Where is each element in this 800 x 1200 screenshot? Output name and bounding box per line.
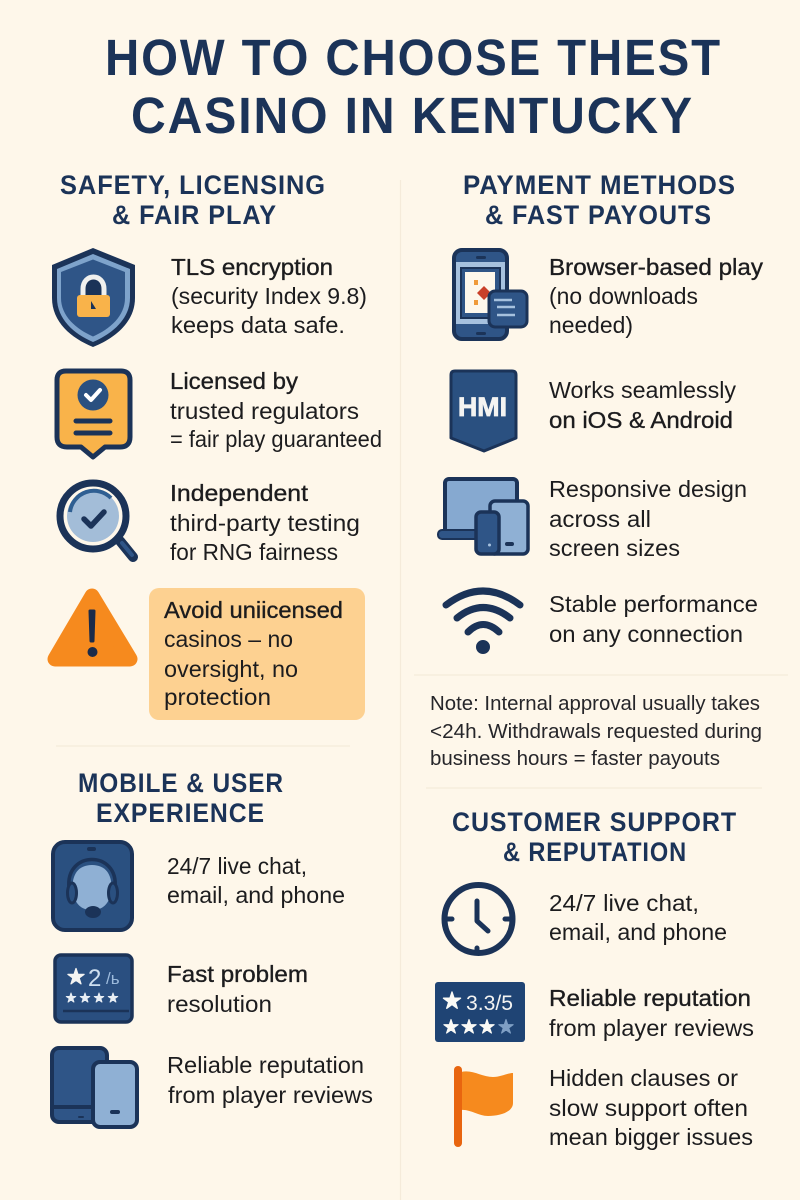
text: reliable reputation right [549, 985, 754, 1041]
icon: HMI shield badge: HMI [458, 392, 507, 422]
callout: avoid unlicensed casinos: oversight, no [164, 656, 298, 682]
icon: shield with padlock [52, 248, 135, 347]
text: independent testing [170, 480, 360, 565]
text: withdrawal note: Note: Internal approval usually takes [430, 693, 760, 715]
text: 24/7 live chat left: 24/7 live chat, [167, 853, 307, 879]
text: 24/7 live chat right [549, 890, 727, 945]
text: hidden clauses: slow support often [549, 1095, 748, 1121]
text: fast problem resolution: resolution [167, 991, 272, 1017]
text: 24/7 live chat left: email, and phone [167, 882, 345, 908]
text: licensed by: trusted regulators [170, 398, 359, 424]
text: reliable reputation right: from player reviews [549, 1015, 754, 1041]
heading: mobile: MOBILE & USER [78, 768, 284, 798]
heading: customer support: CUSTOMER SUPPORT [452, 807, 737, 837]
text: independent testing: for RNG fairness [170, 539, 338, 565]
text: stable performance: on any connection [549, 621, 743, 647]
text: works seamlessly: Works seamlessly [549, 377, 737, 403]
text: independent testing: Independent [170, 480, 309, 506]
heading: payment [463, 170, 736, 230]
text: TLS encryption: keeps data safe. [171, 312, 345, 338]
icon: 3.3/5 rating badge [435, 982, 525, 1042]
icon: 3.3/5 rating badge: 3.3/5 [466, 992, 513, 1015]
text: independent testing: third-party testing [170, 510, 360, 536]
icon: magnifier with check [60, 483, 133, 557]
text: browser-based play: Browser-based play [549, 254, 764, 280]
icon: warning triangle [55, 596, 130, 659]
panel: safety, licensing and fair play [52, 170, 382, 720]
icon: rating tile: /ь [106, 969, 120, 988]
callout: avoid unlicensed casinos: protection [164, 684, 271, 710]
text: TLS encryption: TLS encryption [171, 254, 333, 280]
text: browser-based play: (no downloads [549, 283, 698, 309]
title: CASINO IN KENTUCKY [131, 87, 694, 144]
text: hidden clauses: mean bigger issues [549, 1124, 753, 1150]
text: fast problem resolution: Fast problem [167, 961, 308, 987]
icon: wifi [446, 591, 520, 651]
text: responsive design: Responsive design [549, 476, 747, 502]
icon: rating tile: 2 [88, 965, 101, 992]
text: licensed by: = fair play guaranteed [170, 426, 382, 452]
title: HOW TO CHOOSE THEST [105, 29, 722, 86]
text: 24/7 live chat right: 24/7 live chat, [549, 890, 699, 916]
text: stable performance: Stable performance [549, 591, 758, 617]
text: 24/7 live chat right: email, and phone [549, 919, 727, 945]
text: responsive design [549, 476, 747, 561]
text: licensed by: Licensed by [170, 368, 299, 394]
icon: laptop tablet phone [438, 479, 528, 554]
callout: avoid unlicensed casinos [149, 588, 365, 720]
text: hidden clauses: Hidden clauses or [549, 1065, 738, 1091]
icon: HMI shield badge [451, 371, 516, 451]
callout: avoid unlicensed casinos: casinos – no [164, 626, 293, 652]
heading: safety: & FAIR PLAY [112, 200, 277, 230]
text: browser-based play: needed) [549, 312, 633, 338]
text: reliable reputation left: Reliable reputation [167, 1052, 364, 1078]
heading: customer support: & REPUTATION [503, 837, 687, 867]
heading: safety: SAFETY, LICENSING [60, 170, 326, 200]
text: responsive design: across all [549, 506, 651, 532]
text: stable performance [549, 591, 758, 647]
text: hidden clauses [549, 1065, 753, 1150]
text: works seamlessly: on iOS & Android [549, 407, 733, 433]
text: browser-based play [549, 254, 764, 338]
icon: rating tile [55, 955, 132, 1022]
text: works seamlessly [549, 377, 737, 433]
text: withdrawal note: <24h. Withdrawals requested during [430, 721, 762, 743]
text: reliable reputation left: from player reviews [168, 1082, 373, 1108]
heading: customer support [452, 807, 737, 867]
icon: tablet and phone [52, 1048, 137, 1127]
text: withdrawal note [430, 693, 762, 770]
text: licensed by [170, 368, 382, 452]
callout: avoid unlicensed casinos: Avoid uniicensed [164, 597, 343, 623]
heading: mobile: EXPERIENCE [96, 798, 265, 828]
text: TLS encryption: (security Index 9.8) [171, 283, 367, 309]
icon: headset tile [53, 842, 132, 930]
text: withdrawal note: business hours = faster payouts [430, 748, 720, 770]
heading: mobile [78, 768, 284, 828]
icon: phone with browser card [454, 250, 527, 339]
text: TLS encryption [171, 254, 367, 338]
text: 24/7 live chat left [167, 853, 345, 908]
icon: licence badge [57, 371, 130, 457]
icon: orange flag [454, 1066, 513, 1147]
text: reliable reputation left [167, 1052, 373, 1108]
icon: clock [444, 885, 512, 953]
text: reliable reputation right: Reliable reputation [549, 985, 751, 1011]
heading: safety [60, 170, 326, 230]
text: responsive design: screen sizes [549, 535, 680, 561]
heading: payment: PAYMENT METHODS [463, 170, 736, 200]
heading: payment: & FAST PAYOUTS [485, 200, 712, 230]
panel: mobile and user experience [52, 768, 373, 1127]
text: fast problem resolution [167, 961, 308, 1017]
title [105, 29, 722, 144]
panel: payment methods and fast payouts [430, 170, 764, 770]
panel: customer support and reputation [435, 807, 754, 1150]
